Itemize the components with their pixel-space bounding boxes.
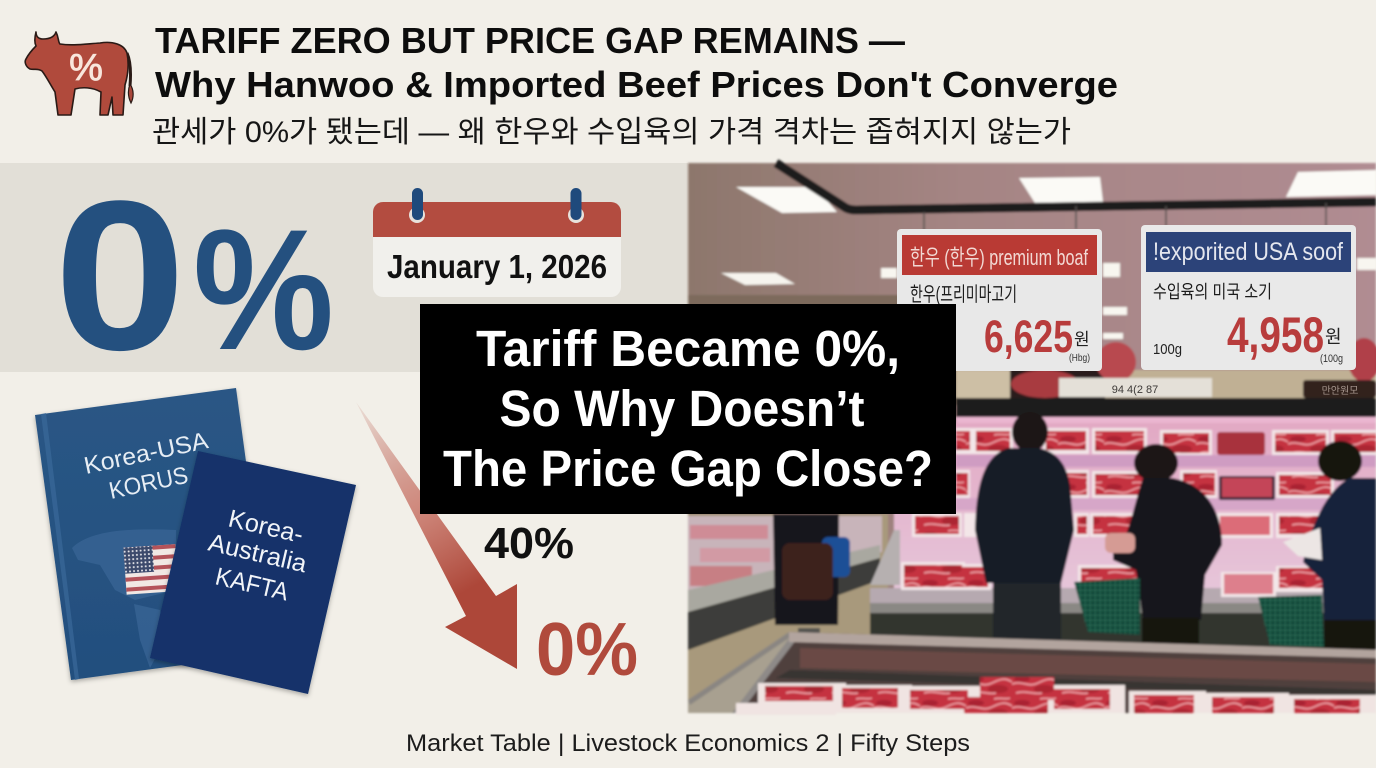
book: Korea-USA KORUS <box>35 388 272 680</box>
baskets <box>1074 578 1140 635</box>
shopper 2 <box>1134 444 1178 482</box>
sign: imported USA beef: 원 <box>1325 327 1342 347</box>
icon: cow with percent sign <box>25 32 133 115</box>
arrow: tariff falling <box>356 402 517 669</box>
shelf meat trays <box>901 428 1376 597</box>
callout: central question: The Price Gap Close? <box>443 440 933 497</box>
big 0% figure: % <box>193 194 334 386</box>
title <box>155 20 1118 105</box>
label: 0% result: 0% <box>536 607 638 691</box>
footer credit: Market Table | Livestock Economics 2 | Fifty Steps <box>406 730 970 757</box>
banner strip below signs <box>1010 350 1105 398</box>
sign: hanwoo premium beef: (Hbg) <box>1069 353 1090 364</box>
foreground trays <box>736 683 1376 715</box>
panel: zero percent band <box>0 157 688 395</box>
callout: central question: So Why Doesn’t <box>500 380 865 437</box>
foreground case <box>732 632 1376 713</box>
ceiling pipe <box>776 163 1376 210</box>
shopper 3 <box>1318 441 1362 481</box>
icon: cow with percent sign: % <box>69 47 103 89</box>
shelf <box>956 398 1376 418</box>
ceiling lights <box>736 187 837 213</box>
label: 40%: 40% <box>484 519 574 568</box>
sign: imported USA beef: !exporited USA soof <box>1153 238 1343 266</box>
callout: central question: Tariff Became 0%, <box>476 320 900 377</box>
icon: calendar with date <box>373 188 621 297</box>
book: Korea-USA KORUS: KORUS <box>107 462 190 505</box>
label strips on shelf: 94 4(2 87 <box>1112 384 1158 396</box>
title: Why Hanwoo & Imported Beef Prices Don't Converge <box>155 64 1118 105</box>
subtitle in Korean: 관세가 0%가 됐는데 — 왜 한우와 수입육의 가격 격차는 좁혀지지 않는가 <box>152 116 1071 149</box>
big 0% figure <box>54 157 334 395</box>
left aisle <box>688 514 888 713</box>
left shopper <box>773 514 839 625</box>
sign: imported USA beef: 수입육의 미국 소기 <box>1153 282 1272 302</box>
sign: hanwoo premium beef: 한우(프리미마고기 <box>910 283 1017 306</box>
sign: hanwoo premium beef: 원 <box>1074 330 1090 349</box>
main case base <box>870 530 900 585</box>
sign: hanwoo premium beef <box>897 229 1102 371</box>
sign: hanwoo premium beef: 한우 (한우) premium boaf <box>910 245 1089 270</box>
sign: imported USA beef: (100g <box>1320 353 1343 365</box>
book: Korea-Australia KAFTA <box>150 451 356 694</box>
sign: imported USA beef: 100g <box>1153 341 1182 358</box>
book: Korea-Australia KAFTA: Australia <box>206 529 309 578</box>
label strips on shelf <box>1112 384 1358 397</box>
sign: imported USA beef <box>1141 225 1356 370</box>
sign: hanwoo premium beef: 6,625 <box>984 311 1073 362</box>
sign hangers <box>924 203 1326 231</box>
icon: calendar with date: January 1, 2026 <box>387 248 607 285</box>
photo: supermarket meat counter <box>688 163 1376 715</box>
big 0% figure: 0 <box>54 157 186 395</box>
callout: central question <box>420 304 956 514</box>
sign: imported USA beef: 4,958 <box>1227 307 1324 363</box>
book: Korea-USA KORUS: Korea-USA <box>82 427 210 480</box>
label strips on shelf: 만안원모 <box>1322 385 1358 397</box>
book: Korea-Australia KAFTA: Korea- <box>226 505 306 549</box>
shopper 1 <box>1012 412 1048 452</box>
title: TARIFF ZERO BUT PRICE GAP REMAINS — <box>155 20 905 61</box>
book: Korea-Australia KAFTA: KAFTA <box>213 563 291 607</box>
flag <box>123 544 179 595</box>
